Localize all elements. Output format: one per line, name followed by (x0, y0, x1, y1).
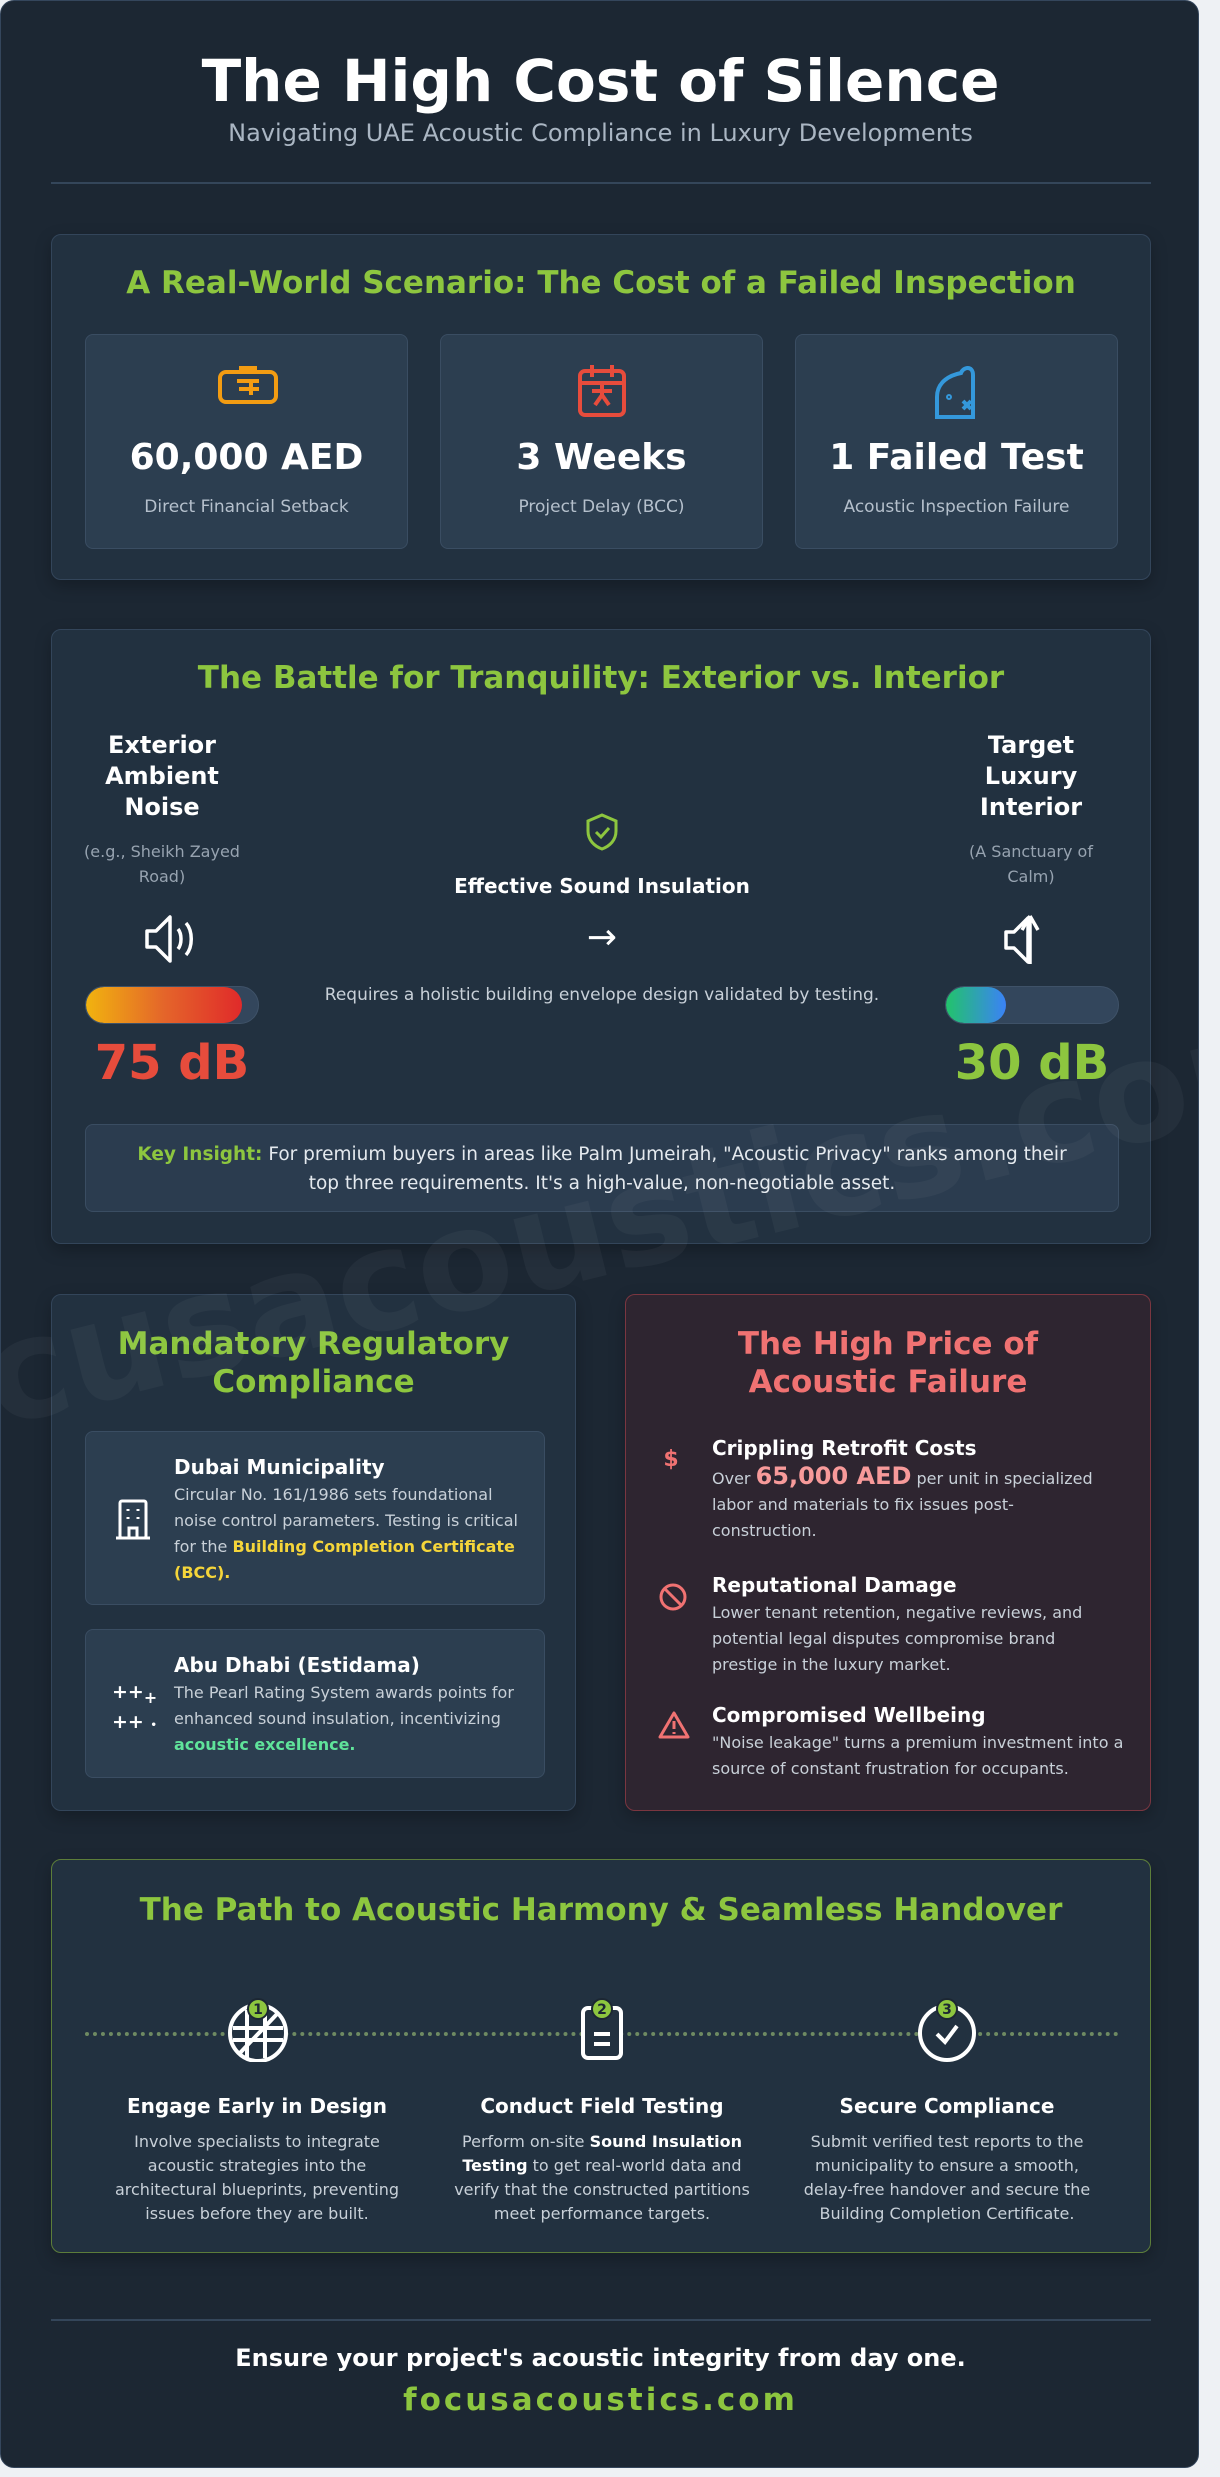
exterior subtitle: Road) (139, 867, 185, 886)
icon: quiet speaker (1004, 915, 1040, 964)
interior subtitle: (A Sanctuary of (969, 842, 1093, 861)
icon: building (116, 1500, 150, 1540)
step 1 (115, 1998, 399, 2223)
icon: loud speaker (145, 915, 193, 963)
icon: sparkles: ++ • (112, 1711, 157, 1733)
center label: Effective Sound Insulation (454, 874, 750, 898)
panel: real-world scenario (51, 234, 1151, 580)
heading: path: The Path to Acoustic Harmony & Seamless Handover (140, 1892, 1062, 1928)
heading: scenario: A Real-World Scenario: The Cost of a Failed Inspection (126, 265, 1076, 301)
step text: Perform on-site Sound Insulation Testing to get real-world data and verify that the constructed partitions meet performance targets. (454, 2132, 750, 2223)
center description: Requires a holistic building envelope design validated by testing. (325, 985, 879, 1005)
heading: price of failure: Acoustic Failure (749, 1364, 1027, 1400)
icon: warning (658, 1711, 690, 1738)
label: Direct Financial Setback (144, 497, 349, 517)
icon: sparkles: +++ (112, 1681, 157, 1707)
panel: path to harmony (51, 1859, 1151, 2253)
icon: blueprint (228, 1998, 288, 2062)
label: Acoustic Inspection Failure (844, 497, 1070, 517)
item: wellbeing (658, 1703, 1123, 1778)
stat: 60,000 AED: 60,000 AED (130, 437, 363, 478)
icon: dollar: $ (663, 1447, 679, 1472)
item: reputational damage (660, 1573, 1082, 1674)
exterior title (105, 731, 219, 821)
heading: regulatory (118, 1326, 509, 1400)
exterior title: Exterior (108, 731, 216, 759)
icon: blueprint: 1 (253, 2002, 263, 2018)
icon: sparkles (112, 1681, 157, 1733)
icon: money (218, 366, 278, 404)
interior subtitle (969, 842, 1094, 886)
icon: shield (586, 813, 618, 851)
callout: key insight: Key Insight: For premium buyers in areas like Palm Jumeirah, "Acoustic Privacy" ranks among their top three requirements. It's a high-value, non-negotiable asset. (137, 1144, 1067, 1194)
step text: Submit verified test reports to the municipality to ensure a smooth, delay-free handover and secure the Building Completion Certificate. (804, 2132, 1090, 2223)
exterior subtitle (84, 842, 240, 886)
meter: 75 dB (85, 986, 259, 1024)
icon: prohibited (660, 1584, 686, 1610)
text: retrofit: Over 65,000 AED per unit in specialized labor and materials to fix issues post-construction. (712, 1462, 1093, 1540)
card: delay (440, 334, 763, 549)
stat: 30 dB: 30 dB (955, 1035, 1109, 1091)
text: dubai: Dubai Municipality (174, 1455, 385, 1479)
stat: 75 dB: 75 dB (95, 1035, 249, 1091)
footer CTA: Ensure your project's acoustic integrity from day one. (235, 2344, 966, 2372)
step title: Engage Early in Design (127, 2094, 387, 2118)
icon: clipboard (581, 1998, 623, 2060)
heading: regulatory: Mandatory Regulatory (118, 1326, 509, 1362)
text: dubai: Circular No. 161/1986 sets foundational noise control parameters. Testing is critical for the Building Completion Certificate (BCC). (174, 1485, 518, 1582)
exterior subtitle: (e.g., Sheikh Zayed (84, 842, 240, 861)
label: Project Delay (BCC) (518, 497, 685, 517)
text: retrofit: Crippling Retrofit Costs (712, 1436, 977, 1460)
title: The High Cost of Silence (202, 47, 999, 115)
exterior title: Ambient (105, 762, 219, 790)
interior subtitle: Calm) (1007, 867, 1055, 886)
callout: key insight (85, 1124, 1119, 1212)
item: retrofit costs (663, 1436, 1093, 1540)
text: reputational: Reputational Damage (712, 1573, 957, 1597)
step 3 (804, 1998, 1090, 2223)
icon: clipboard: 2 (597, 2002, 607, 2018)
text: wellbeing (712, 1703, 1123, 1778)
text: reputational: Lower tenant retention, negative reviews, and potential legal disputes compromise brand prestige in the luxury market. (712, 1603, 1082, 1674)
interior title (980, 731, 1082, 821)
card: abu dhabi (85, 1629, 545, 1778)
card: dubai municipality (85, 1431, 545, 1605)
panel: exterior vs interior (51, 629, 1151, 1244)
panel: regulatory compliance (51, 1294, 576, 1811)
column: exterior (84, 731, 240, 886)
card: financial (85, 334, 408, 549)
step text: Involve specialists to integrate acoustic strategies into the architectural blueprints, preventing issues before they are built. (115, 2132, 399, 2223)
exterior title: Noise (124, 793, 200, 821)
column: interior (969, 731, 1094, 886)
heading: price of failure (738, 1326, 1038, 1400)
stat: 3 weeks: 3 Weeks (516, 437, 687, 478)
interior title: Target (988, 731, 1074, 759)
icon: ear (935, 366, 975, 419)
card: failed test (795, 334, 1118, 549)
step title: Secure Compliance (840, 2094, 1054, 2118)
arrow: → (587, 917, 617, 958)
interior title: Interior (980, 793, 1082, 821)
text: wellbeing: "Noise leakage" turns a premium investment into a source of constant frustration for occupants. (712, 1733, 1123, 1778)
text: wellbeing: Compromised Wellbeing (712, 1703, 986, 1727)
icon: check circle: 3 (942, 2002, 952, 2018)
heading: price of failure: The High Price of (738, 1326, 1038, 1362)
step 2 (454, 1998, 750, 2223)
icon: calendar (578, 365, 626, 417)
panel: price of failure (625, 1294, 1151, 1811)
interior title: Luxury (985, 762, 1077, 790)
stat: failed test: 1 Failed Test (829, 437, 1084, 478)
text: abu dhabi: Abu Dhabi (Estidama) (174, 1653, 420, 1677)
icon: check circle (918, 1998, 976, 2062)
step title: Conduct Field Testing (480, 2094, 724, 2118)
subtitle: Navigating UAE Acoustic Compliance in Luxury Developments (228, 119, 973, 147)
heading: battle: The Battle for Tranquility: Exterior vs. Interior (198, 660, 1004, 696)
text: abu dhabi: The Pearl Rating System awards points for enhanced sound insulation, incentivizing acoustic excellence. (174, 1683, 514, 1754)
heading: regulatory: Compliance (212, 1364, 415, 1400)
footer URL: focusacoustics.com (403, 2382, 798, 2418)
meter: 30 dB (945, 986, 1119, 1024)
